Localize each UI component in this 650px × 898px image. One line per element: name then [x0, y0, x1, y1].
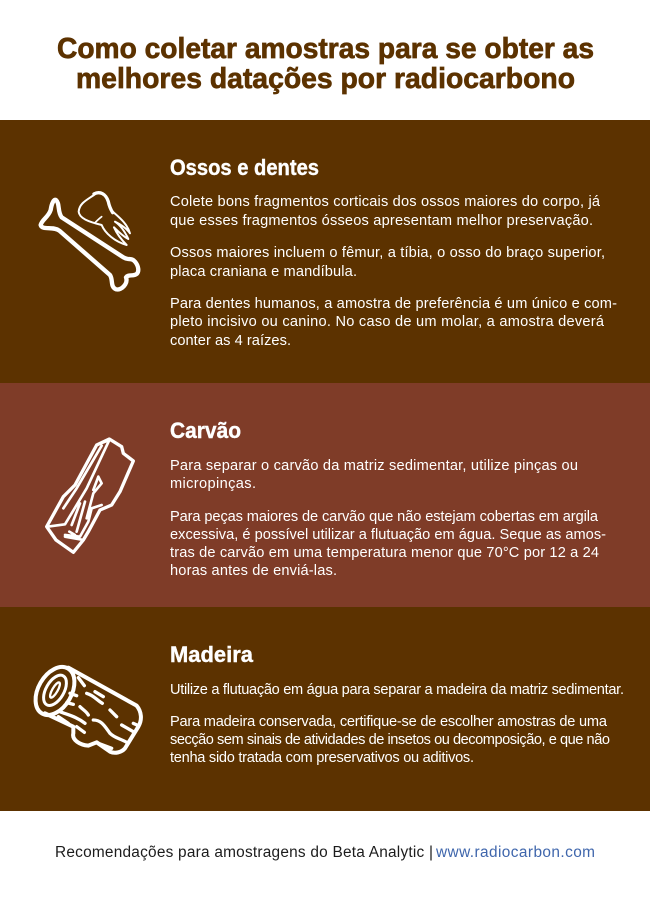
- text block: ossos paragraph 2: [170, 245, 605, 280]
- heading: madeira: Madeira: [170, 642, 254, 667]
- text block: ossos paragraph 3: pleto incisivo ou canino. No caso de um molar, a amostra deverá: [170, 314, 605, 330]
- text block: madeira paragraph 2: secção sem sinais de atividades de insetos ou decomposição, e que não: [170, 732, 610, 748]
- text block: carvão paragraph 1: Para separar o carvão da matriz sedimentar, utilize pinças ou: [170, 458, 578, 474]
- title: [57, 33, 594, 95]
- heading: carvão: Carvão: [170, 418, 241, 443]
- title: melhores datações por radiocarbono: [76, 63, 575, 95]
- heading: ossos e dentes: Ossos e dentes: [170, 155, 319, 180]
- title: Como coletar amostras para se obter as: [57, 33, 594, 65]
- text block: ossos paragraph 1: Colete bons fragmentos corticais dos ossos maiores do corpo, já: [170, 194, 601, 210]
- text block: carvão paragraph 2: [170, 509, 606, 579]
- text block: carvão paragraph 2: horas antes de enviá-las.: [170, 563, 337, 579]
- panel: madeira: [0, 607, 650, 811]
- text block: madeira paragraph 2: tenha sido tratada com preservativos ou aditivos.: [170, 750, 474, 766]
- text block: ossos paragraph 1: [170, 194, 601, 229]
- icon: charcoal: [47, 439, 133, 552]
- text block: madeira paragraph 2: Para madeira conservada, certifique-se de escolher amostras de uma: [170, 714, 608, 730]
- text block: madeira paragraph 2: [170, 714, 610, 766]
- panel: ossos e dentes: [0, 120, 650, 383]
- text block: carvão paragraph 2: excessiva, é possível utilizar a flutuação em água. Seque as amos-: [170, 527, 606, 543]
- text block: madeira paragraph 1: Utilize a flutuação em água para separar a madeira da matriz sedimentar.: [170, 682, 624, 698]
- text block: ossos paragraph 2: placa craniana e mandíbula.: [170, 264, 357, 280]
- text block: ossos paragraph 2: Ossos maiores incluem o fêmur, a tíbia, o osso do braço superior,: [170, 245, 605, 261]
- text block: carvão paragraph 1: [170, 458, 578, 492]
- icon: bone and tooth: [41, 193, 138, 289]
- text block: ossos paragraph 3: conter as 4 raízes.: [170, 333, 291, 349]
- text block: ossos paragraph 3: [170, 296, 617, 349]
- text block: ossos paragraph 1: que esses fragmentos ósseos apresentam melhor preservação.: [170, 213, 593, 229]
- text block: ossos paragraph 3: Para dentes humanos, a amostra de preferência é um único e com-: [170, 296, 617, 312]
- text block: carvão paragraph 2: Para peças maiores de carvão que não estejam cobertas em argila: [170, 509, 599, 525]
- icon: wood log: [28, 660, 141, 753]
- panel: carvão: [0, 383, 650, 607]
- footer: www.radiocarbon.com: [435, 844, 595, 861]
- text block: carvão paragraph 1: micropinças.: [170, 476, 256, 492]
- text block: carvão paragraph 2: tras de carvão em uma temperatura menor que 70°C por 12 a 24: [170, 545, 599, 561]
- footer: Recomendações para amostragens do Beta Analytic |: [55, 844, 433, 861]
